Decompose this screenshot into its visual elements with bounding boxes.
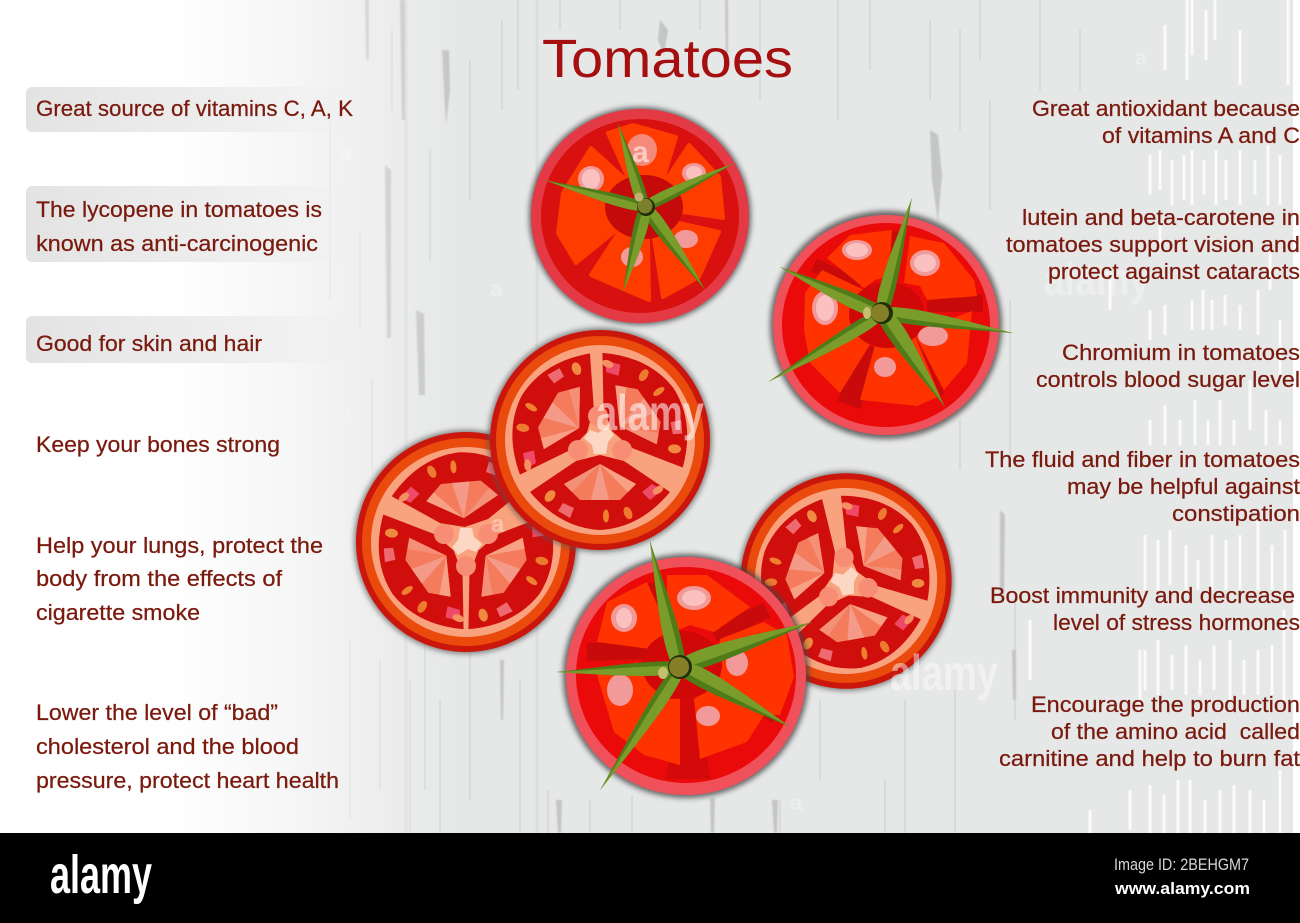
callout: immunity bbox=[990, 583, 1300, 635]
callout: vision: tomatoes support vision and bbox=[1006, 232, 1300, 257]
callout: cholesterol: cholesterol and the blood bbox=[36, 734, 299, 759]
tomato: bottom bbox=[556, 539, 815, 798]
callout: skin and hair bbox=[26, 316, 380, 363]
callout: blood sugar bbox=[1036, 340, 1300, 392]
callout: bones: Keep your bones strong bbox=[36, 432, 280, 457]
callout: lungs: cigarette smoke bbox=[36, 600, 200, 625]
callout: carnitine: of the amino acid called bbox=[1051, 719, 1300, 744]
callout: lungs: body from the effects of bbox=[36, 566, 283, 591]
panel: right benefits bbox=[985, 96, 1300, 771]
watermarks: a bbox=[491, 511, 505, 538]
callout: constipation: may be helpful against bbox=[1067, 474, 1300, 499]
slice: lower left bbox=[352, 430, 580, 654]
title: Tomatoes bbox=[542, 29, 793, 89]
callout: carnitine: Encourage the production bbox=[1031, 692, 1300, 717]
image id: Image ID: 2BEHGM7 bbox=[1114, 855, 1249, 874]
callout: constipation bbox=[985, 447, 1300, 526]
callout: lycopene: known as anti-carcinogenic bbox=[36, 231, 318, 256]
callout: lungs: Help your lungs, protect the bbox=[36, 533, 323, 558]
callout: lycopene bbox=[26, 186, 380, 262]
watermarks bbox=[340, 45, 1150, 815]
callout: cholesterol: Lower the level of “bad” bbox=[36, 700, 278, 725]
watermarks: a bbox=[340, 140, 353, 165]
callout: cholesterol: pressure, protect heart health bbox=[36, 768, 339, 793]
watermarks: alamy bbox=[596, 385, 704, 441]
callout: carnitine: carnitine and help to burn fat bbox=[999, 746, 1300, 771]
callout: skin and hair: Good for skin and hair bbox=[36, 331, 262, 356]
watermarks: alamy bbox=[890, 645, 998, 701]
callout: lungs bbox=[36, 533, 323, 625]
callout: cholesterol bbox=[36, 700, 339, 793]
panel: left benefits bbox=[26, 87, 380, 793]
callout: lycopene: The lycopene in tomatoes is bbox=[36, 197, 322, 222]
callout: vitamins: Great source of vitamins C, A, K bbox=[36, 96, 353, 121]
watermarks: a bbox=[1135, 45, 1148, 70]
callout: blood sugar: controls blood sugar level bbox=[1036, 367, 1300, 392]
watermarks: alamy bbox=[1044, 253, 1150, 305]
callout: immunity: Boost immunity and decrease bbox=[990, 583, 1295, 608]
footer bar bbox=[0, 833, 1300, 923]
watermarks: a bbox=[632, 136, 649, 169]
website: www.alamy.com bbox=[1114, 879, 1250, 898]
callout: carnitine bbox=[999, 692, 1300, 771]
callout: antioxidant: of vitamins A and C bbox=[1102, 123, 1300, 148]
tomato: top bbox=[529, 107, 751, 325]
tomato: right bbox=[765, 196, 1015, 439]
callout: constipation: constipation bbox=[1172, 501, 1300, 526]
callout: vision: lutein and beta-carotene in bbox=[1022, 205, 1300, 230]
callout: vision bbox=[1006, 205, 1300, 284]
watermarks: a bbox=[340, 402, 353, 427]
watermarks: a bbox=[490, 276, 503, 301]
footer logo: alamy bbox=[50, 845, 152, 905]
callout: blood sugar: Chromium in tomatoes bbox=[1062, 340, 1300, 365]
callout: vision: protect against cataracts bbox=[1048, 259, 1300, 284]
callout: constipation: The fluid and fiber in tomatoes bbox=[985, 447, 1300, 472]
callout: vitamins bbox=[26, 87, 380, 132]
slice: right bbox=[738, 471, 955, 691]
callout: antioxidant: Great antioxidant because bbox=[1032, 96, 1300, 121]
slice: centre bbox=[487, 328, 714, 552]
callout: antioxidant bbox=[1032, 96, 1300, 148]
callout: immunity: level of stress hormones bbox=[1053, 610, 1300, 635]
watermarks: a bbox=[790, 790, 803, 815]
